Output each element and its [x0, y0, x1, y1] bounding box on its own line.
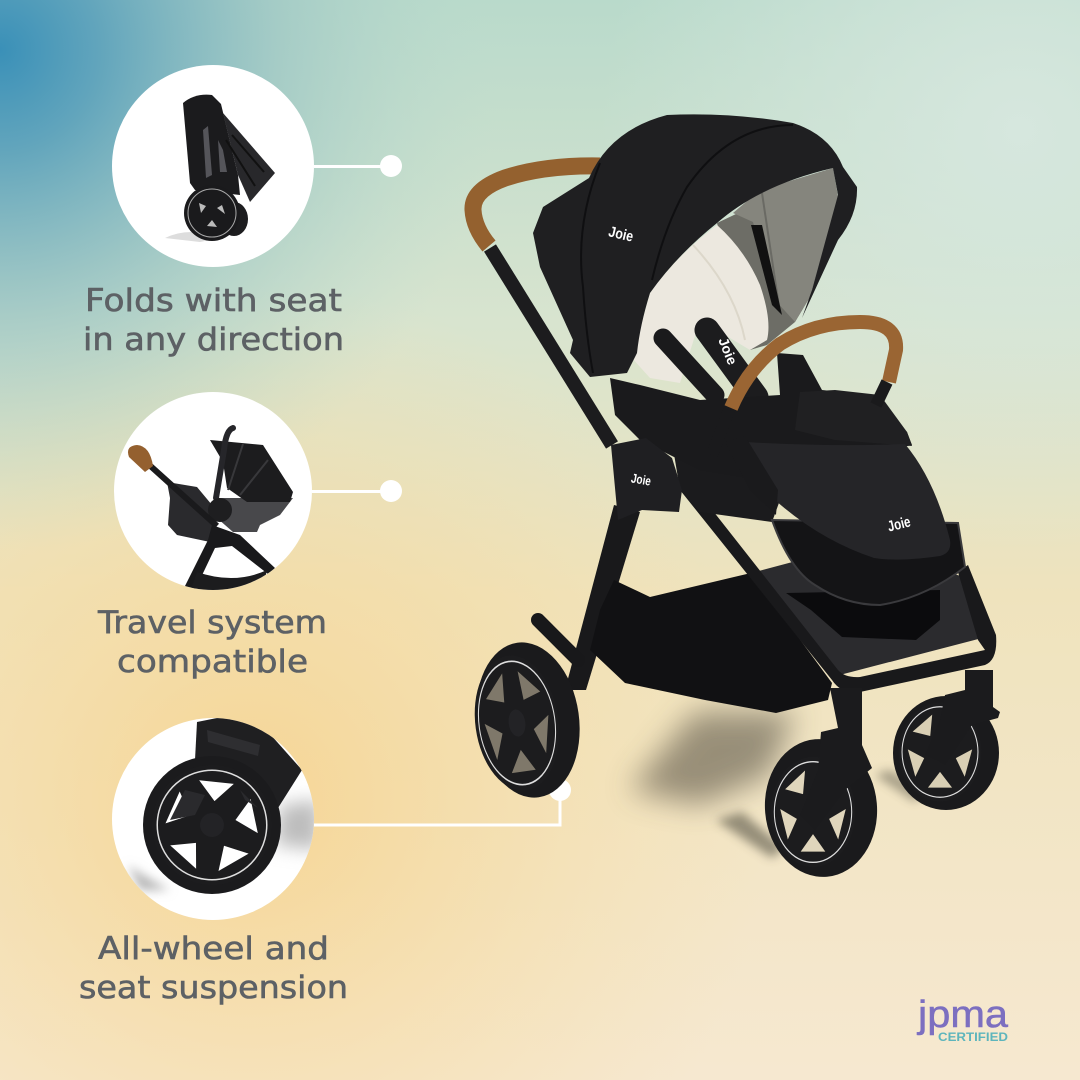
feature 2: travel system — [97, 392, 402, 680]
seat base and back straps — [610, 353, 912, 480]
armrest base — [712, 382, 887, 455]
canopy — [533, 114, 857, 377]
harness straps: Joie — [715, 335, 741, 367]
harness straps — [663, 330, 756, 397]
hub logo: Joie — [630, 470, 652, 489]
seat cushion — [795, 390, 912, 446]
label: folds: in any direction — [83, 322, 344, 358]
rear leg — [565, 505, 640, 690]
footrest rail — [772, 520, 965, 605]
connector line with dot — [314, 155, 402, 177]
label: folds — [83, 283, 344, 358]
front wheel centre — [759, 688, 883, 882]
canopy logo: Joie — [607, 223, 635, 246]
icon: wheel close-up in circle — [112, 716, 320, 920]
icon: car seat on stroller in circle — [114, 392, 312, 592]
connector elbow with dot — [314, 779, 571, 825]
footmuff — [745, 442, 950, 560]
seat back — [632, 225, 768, 383]
label: suspension — [79, 931, 348, 1006]
side bolster — [725, 436, 778, 515]
handle leather — [473, 166, 600, 246]
feature 3: suspension — [79, 716, 571, 1006]
handle tube — [490, 248, 612, 445]
tray — [751, 560, 986, 677]
label: travel — [97, 605, 327, 680]
icon: folded stroller in circle — [112, 65, 314, 267]
seat support — [670, 430, 780, 522]
front wheel right — [893, 670, 1000, 810]
canopy interior visor — [717, 168, 838, 350]
connector line with dot — [312, 480, 402, 502]
feature 1: fold — [83, 65, 402, 358]
hub logo — [611, 438, 682, 520]
rear left wheel — [466, 636, 589, 804]
jpma certified logo: jpma — [917, 994, 1009, 1036]
label: folds: Folds with seat — [85, 283, 342, 319]
label: travel: Travel system — [97, 605, 327, 641]
basket — [590, 573, 832, 713]
label: travel: compatible — [117, 644, 308, 680]
footmuff logo: Joie — [886, 513, 912, 536]
front armrest leather bumper — [731, 322, 896, 408]
main frame arm and tray rail — [680, 488, 996, 692]
ground shadow — [630, 712, 925, 858]
jpma certified logo: CERTIFIED — [938, 1030, 1008, 1044]
label: suspension: All-wheel and — [98, 931, 329, 967]
stroller photo illustration — [466, 114, 1000, 882]
label: suspension: seat suspension — [79, 970, 348, 1006]
parking pedal — [538, 620, 578, 660]
